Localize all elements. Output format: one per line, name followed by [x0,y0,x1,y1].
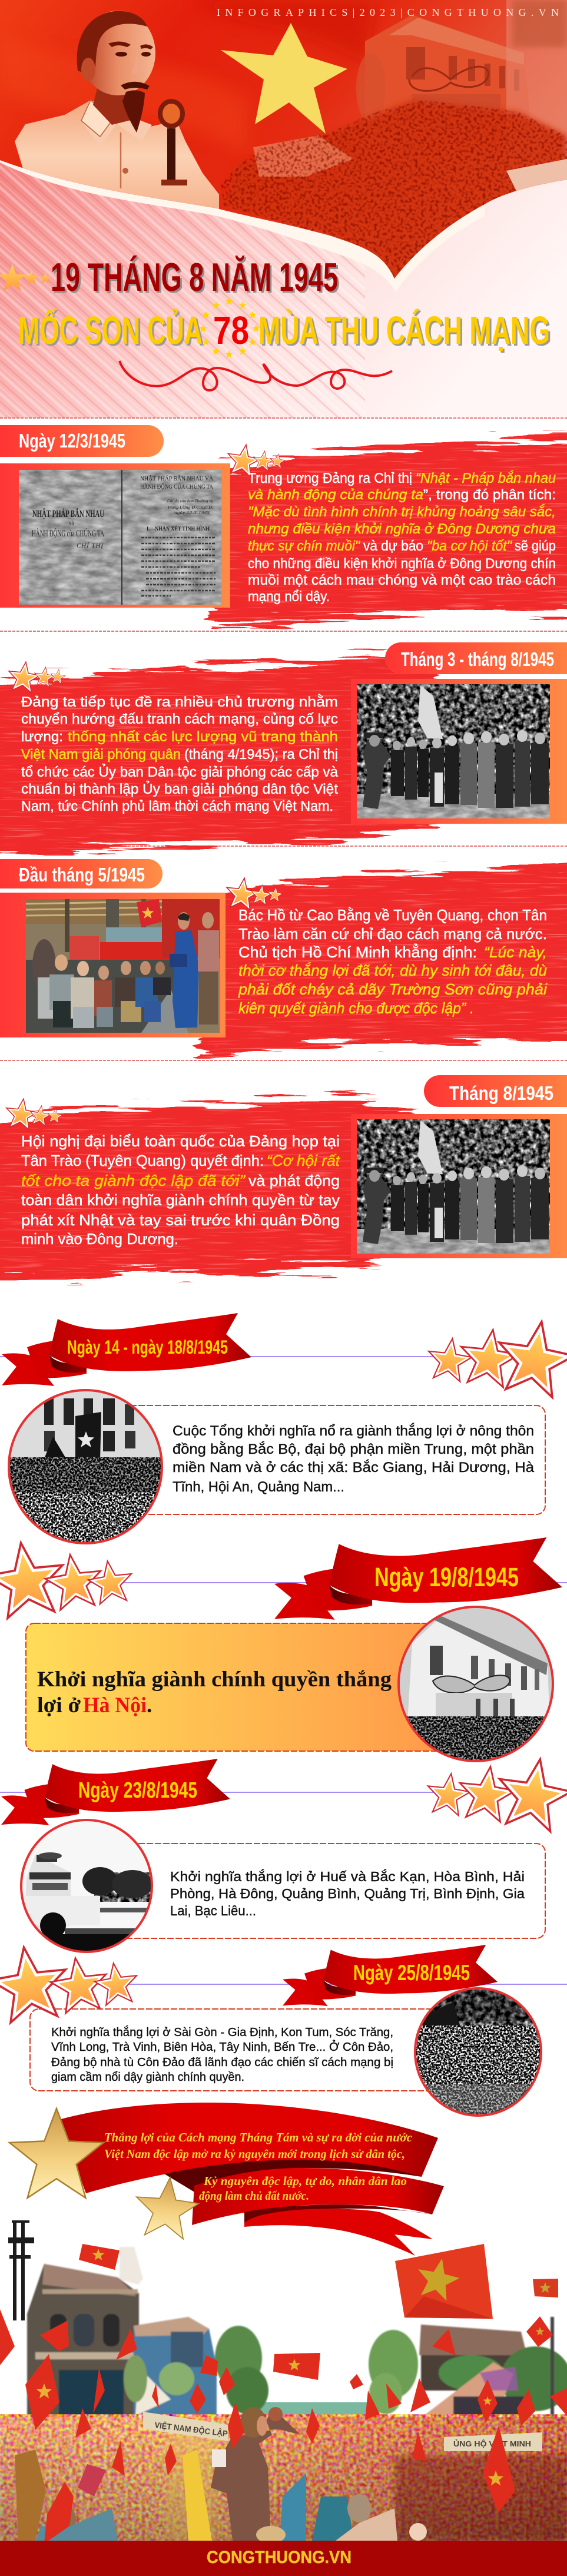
date pill [0,425,164,457]
text block [37,1667,392,1718]
text block: “Nhật - Pháp bắn nhau [416,470,556,486]
banner fold lower [244,2204,432,2223]
ring of stars around 78 [199,297,260,358]
text block: tốt cho ta giành độc lập đã tới” [21,1172,246,1189]
message text 2: Kỷ nguyên độc lập, tự do, nhân dân lao [203,2174,407,2188]
standing Ho figure [170,912,219,1028]
text block: thống nhất các lực lượng vũ trang thành [68,729,338,745]
photo: directive document: HÀNH ĐỘNG của CHÚNG TA [32,528,104,539]
text block: miền Nam và ở các thị xã: Bắc Giang, Hải Dương, Hà [173,1460,535,1476]
crowd mass [0,2414,567,2541]
red ribbon flourish [120,361,392,390]
title line 2: MỐC SON CỦA [18,308,203,353]
round photo: temple [21,1820,153,1953]
text block: thời cơ thắng lợi đã tới, dù hy sinh tới đâu, dù [238,962,547,979]
ribbon heading [283,1945,498,2006]
text block: Khởi nghĩa giành chính quyền thắng [37,1667,392,1692]
large right flag [395,2244,493,2319]
message text 1: Việt Nam độc lập mở ra kỷ nguyên mới trong lịch sử dân tộc, [104,2147,405,2161]
text block: Nam, tức Chính phủ lâm thời cách mạng Việt Nam. [21,798,333,814]
text block: Đảng ta tiếp tục đề ra nhiều chủ trương nhằm [21,694,338,710]
text block: "ba cơ hội tốt" [427,538,512,554]
text block [21,1132,341,1248]
head [89,11,155,95]
date pill: Ngày 12/3/1945 [19,430,125,452]
date pill [424,1075,567,1107]
stars [425,1315,567,1400]
opera house faded [356,15,530,120]
brush stroke background [0,659,439,854]
banner fold [164,2160,422,2193]
text block: lợi ở [37,1693,81,1718]
title line 2: 78 [213,309,249,353]
ribbon heading [2,1313,251,1386]
text block [248,470,556,605]
banner: Viet Nam doc lap [143,2412,228,2441]
left buildings [27,2247,268,2416]
text block [173,1423,535,1495]
photo: directive document: và [69,520,74,526]
text block: Lai, Bạc Liêu... [170,1903,256,1918]
text block: phát xít Nhật và tay sai trước khi quân Đồng [21,1211,340,1229]
ribbon heading: Ngày 14 - ngày 18/8/1945 [67,1337,228,1358]
text block: Phòng, Hà Đông, Quảng Bình, Quảng Trị, Bình Định, Gia [170,1886,525,1901]
header lower pink streak background [0,147,567,418]
text block: chuyển hướng đấu tranh cách mạng, củng cố lực [21,711,338,727]
orange text box [26,1623,497,1751]
text block: Chủ tịch Hồ Chí Minh khẳng định: [238,943,477,961]
dashed text box [88,1405,545,1514]
left pole [8,2220,34,2320]
photo: directive document: CHỈ THỊ [77,542,104,549]
salmon top-right tone [506,0,567,159]
jacket [15,100,219,212]
closing painting: August Revolution crowd [0,2220,567,2544]
top left flag [79,2244,120,2270]
text block: muồi một cách mau chóng và một cao trào cách [248,572,556,588]
waving flag with historic scenes [0,0,567,294]
text block: tổ chức các Ủy ban Dân tộc giải phóng các cấp và [21,763,339,780]
painting: Ho Chi Minh at Tan Trao [26,899,220,1033]
banner: Viet Minh [444,2432,542,2451]
date pill: Đầu tháng 5/1945 [19,864,145,886]
brush stroke background [200,866,567,1055]
photo: directive document: Chỉ thị của ban Thường vụ [167,499,214,503]
text block: Tĩnh, Hội An, Quảng Nam... [173,1479,344,1495]
microphone [158,99,187,185]
brush stroke background [0,1097,412,1282]
text block: nhưng điều kiện khởi nghĩa ở Đông Dương chưa [248,521,556,537]
header: flag hero [0,0,567,418]
text block: “Lúc này, [484,943,547,961]
foreground figures [15,2449,427,2544]
brush stroke background [212,439,567,629]
text block: Khởi nghĩa thắng lợi ở Huế và Bắc Kạn, Hòa Bình, Hải [170,1869,525,1884]
banner: Viet Nam doc lap: VIỆT NAM ĐỘC LẬP [154,2419,228,2438]
ribbon heading: Ngày 25/8/1945 [353,1961,470,1985]
photo: directive document: ngày 12-3-1945 [174,510,210,515]
right buildings and trees [369,2317,567,2426]
white curved edge of flag [0,160,485,292]
text block: toàn dân khởi nghĩa giành chính quyền từ tay [21,1191,340,1209]
date pill [0,859,163,888]
message text 1: Thắng lợi của Cách mạng Tháng Tám và sự ra đời của nước [104,2130,413,2144]
text block [51,2025,393,2084]
text block: Hội nghị đại biểu toàn quốc của Đảng họp tại [21,1132,340,1150]
panel: early May 1945 [0,859,567,1055]
small gold star [132,2174,201,2240]
text block: "Mặc dù tình hình chính trị khủng hoảng sâu sắc, [248,504,556,520]
banner 1 [59,2103,438,2193]
text block: Bác Hồ từ Cao Bằng về Tuyên Quang, chọn Tân [238,906,547,924]
crowd scene [212,100,567,289]
text block: mạng nổi dậy. [248,589,330,605]
banner 2 [192,2168,444,2225]
banner: Viet Minh: ỦNG HỘ VIỆT MINH [453,2439,531,2448]
decorative stars left of title [0,264,51,291]
text block [21,694,339,814]
text block: Trào làm căn cứ chỉ đạo cách mạng cả nước. [238,925,547,943]
text block: thực sự chín muồi" [248,538,360,554]
photo frame [0,463,230,608]
photo: directive document: HÀNH ĐỘNG CỦA CHÚNG TA [140,483,214,490]
round photo: crowd at opera house [9,1390,162,1543]
photo: directive document: I.—NHẬN XÉT TÌNH HÌNH [147,526,210,532]
date pill [385,642,567,674]
round photo: Saigon crowd [415,1988,542,2117]
ribbon heading [1,1759,230,1825]
seated figures [32,939,171,1028]
text block: lượng: [21,729,63,745]
dashed text box [30,2009,454,2091]
title line 1 [51,255,340,301]
stars cluster [4,1097,63,1130]
photo frame [351,679,567,824]
photo: directive document: Trung Ương Đ.C.S.Đ.D. [167,505,213,510]
timeline: 25/8/1945 [0,1942,542,2117]
text block: Cuộc Tổng khởi nghĩa nổ ra giành thắng lợi ở nông thôn [173,1423,534,1439]
ribbon heading: Ngày 19/8/1945 [374,1562,519,1592]
photo frame [0,893,226,1037]
text block: Tân Trào (Tuyên Quang) quyết định: [21,1152,264,1169]
stars [425,1753,567,1834]
footer bar: CONGTHUONG.VN [207,2548,352,2567]
photo frame [351,1114,567,1258]
text block: sẽ giúp [515,538,556,554]
title line 1: 19 THÁNG 8 NĂM 1945 [52,257,340,301]
photo: liberation army [357,684,550,818]
closing message ribbons [9,2103,444,2256]
dashed dividers [0,418,567,1060]
ribbon heading [274,1537,562,1620]
text block: giam cầm nổi dậy giành chính quyền. [51,2071,244,2084]
text block: và phát động [248,1172,340,1189]
text block [170,1869,525,1918]
text block: Vĩnh Long, Trà Vinh, Biên Hòa, Tây Ninh, Bến Tre... Ở Côn Đảo, [51,2040,393,2054]
text block: Khởi nghĩa thắng lợi ở Sài Gòn - Gia Định, Kon Tum, Sóc Trăng, [51,2025,393,2039]
text block: chuẩn bị thành lập Ủy ban giải phóng dân tộc Việt [21,780,338,797]
neck [93,88,130,125]
big gold star [9,2108,104,2198]
photo: directive document [19,470,221,605]
stars [0,1942,140,2024]
text block: Đảng bộ nhà tù Côn Đảo đã lãnh đạo các chiến sĩ cách mạng bị [51,2056,393,2069]
street background and distant horizon [259,2402,371,2426]
ribbon tail [244,2209,433,2256]
round photo: Hanoi opera house [398,1606,553,1763]
title line 2: MỐC SON CỦA [20,310,204,354]
text block [238,906,548,1017]
text block: cho những điều kiện khởi nghĩa ở Đông Dương chín [248,556,556,572]
panel: August 1945 [0,1075,567,1282]
text block: . [147,1693,152,1718]
text block: kiên quyết giành cho được độc lập” . [238,999,474,1017]
text block: Hà Nội [83,1693,147,1718]
Ho Chi Minh portrait [15,11,219,212]
timeline: 23/8/1945 [1,1753,567,1953]
text block: và hành động của chúng ta [248,487,423,503]
stars [0,1538,135,1620]
text block: Việt Nam giải phóng quân [21,747,181,762]
message text 2: động làm chủ đất nước. [199,2189,309,2203]
text block: minh vào Đông Dương. [21,1230,178,1248]
footer bar [0,2541,567,2576]
message text 2 [199,2174,407,2203]
central speaker [211,2407,300,2541]
ribbon heading: Ngày 23/8/1945 [78,1778,197,1803]
stars cluster [6,660,66,694]
timeline purple lines [0,1357,567,1984]
text block: phải đốt cháy cả dãy Trường Sơn cũng phải [238,980,548,998]
timeline: 19/8/1945 [0,1537,562,1763]
dashed text box [88,1844,545,1938]
flags across the scene [0,2244,567,2544]
text block: “Cơ hội rất [267,1152,341,1169]
text block: ”, trong đó phân tích: [423,487,556,503]
timeline: 14-18/8/1945 [2,1313,567,1543]
text block: đồng bằng Bắc Bộ, đại bộ phận miền Trung, một phần [173,1441,534,1457]
message text 1 [104,2130,413,2161]
photo: directive document: NHẬT PHÁP BẮN NHAU [32,508,104,519]
panel: 12/3/1945 [0,425,567,629]
text block: và dự báo [363,538,423,554]
photo: directive document: NHẬT PHÁP BẮN NHAU VÀ [140,475,214,482]
top credit line: INFOGRAPHICS|2023|CONGTHUONG.VN [217,6,559,18]
flag gold star [221,23,347,134]
text block: (tháng 4/1945); ra Chỉ thị [184,747,338,762]
stars cluster [225,442,286,478]
stars cluster [224,876,283,911]
text block: Trung ương Đảng ra Chỉ thị [248,470,412,486]
photo: liberation army [357,1119,550,1254]
title line 1: 19 THÁNG 8 NĂM 1945 [51,255,338,300]
panel: March - August 1945 [0,642,567,854]
title line 2 [18,308,552,354]
